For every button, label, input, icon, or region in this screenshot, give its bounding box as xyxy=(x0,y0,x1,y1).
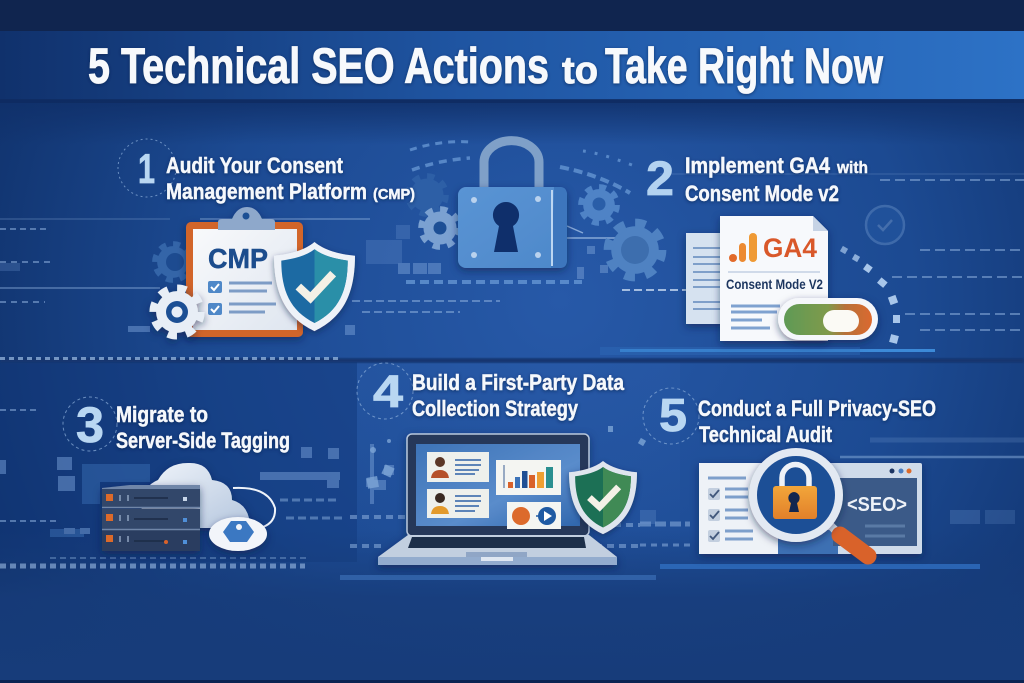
heading 2: with xyxy=(836,158,868,177)
keyhole xyxy=(493,202,519,252)
dashes around lock xyxy=(406,142,730,290)
icon: magnifying glass with lock xyxy=(753,452,868,556)
icon: browser window: <SEO> xyxy=(847,494,907,516)
profile card 1 xyxy=(427,452,489,482)
icon: cloud xyxy=(142,463,250,528)
icon: GA4 document xyxy=(720,216,828,341)
icon: dim clock xyxy=(866,206,904,244)
profile card 2 xyxy=(427,489,489,518)
heading 3 xyxy=(116,402,290,453)
icon: clipboard xyxy=(186,207,303,337)
icon: GA4 document: Consent Mode V2 xyxy=(726,276,823,292)
icon: laptop xyxy=(378,434,617,565)
panel: step 2 GA4 xyxy=(646,153,904,344)
heading 4: Collection Strategy xyxy=(412,396,579,421)
icon: scattered squares xyxy=(366,426,646,489)
icon: green shield xyxy=(569,461,637,534)
left dotted line xyxy=(0,357,340,360)
icon: curved dots xyxy=(840,246,900,344)
heading 3: Server-Side Tagging xyxy=(116,428,290,453)
heading 4: Build a First-Party Data xyxy=(412,370,625,395)
icon: dim gear xyxy=(155,244,191,280)
icon: back document xyxy=(686,233,726,324)
heading 4 xyxy=(412,370,625,421)
title: to xyxy=(562,50,598,92)
heading 1: (CMP) xyxy=(373,186,415,203)
number 4 badge: 4 xyxy=(373,366,403,417)
title: 5 Technical SEO Actions xyxy=(88,38,549,94)
number 5 badge xyxy=(643,388,699,444)
decorative data streaks xyxy=(0,142,1024,566)
heading 2: Implement GA4 xyxy=(685,153,831,178)
media card xyxy=(507,502,561,529)
heading 5 xyxy=(698,396,936,447)
heading 2 xyxy=(685,153,868,206)
panel: step 4 first-party data xyxy=(357,363,646,565)
title: Take Right Now xyxy=(605,38,883,94)
icon: browser window xyxy=(699,463,922,554)
panel: step 5 privacy-SEO audit xyxy=(643,388,936,556)
number 3 badge xyxy=(63,397,117,453)
icon: consent toggle xyxy=(778,298,878,340)
heading 2: Consent Mode v2 xyxy=(685,181,839,206)
gears around padlock xyxy=(409,177,661,276)
icon: tag node xyxy=(209,517,267,551)
number 1 badge xyxy=(118,139,176,197)
number 1 badge: 1 xyxy=(138,145,155,192)
number 4 badge xyxy=(357,363,413,419)
number 2 badge: 2 xyxy=(646,153,674,206)
panel: step 3 server-side tagging xyxy=(63,397,290,551)
heading 1: Audit Your Consent xyxy=(166,153,344,178)
icon: server stack xyxy=(102,485,200,551)
icon: clipboard: CMP xyxy=(208,243,268,274)
heading 1: Management Platform xyxy=(166,179,367,204)
icon: GA4 document: GA4 xyxy=(763,233,817,263)
bar chart card xyxy=(496,460,561,495)
number 5 badge: 5 xyxy=(659,389,687,441)
pixel squares xyxy=(0,225,1015,537)
panel: step 1 audit CMP xyxy=(118,139,415,337)
bottom dotted line xyxy=(0,564,305,568)
icon: shield with check xyxy=(274,242,355,331)
heading 5: Technical Audit xyxy=(699,422,833,447)
icon: central padlock xyxy=(409,141,661,276)
heading 1 xyxy=(166,153,415,204)
icon: connector loop xyxy=(233,488,275,527)
heading 5: Conduct a Full Privacy-SEO xyxy=(698,396,936,421)
title band xyxy=(0,31,1024,103)
heading 3: Migrate to xyxy=(116,402,208,427)
icon: white gear xyxy=(154,289,200,335)
number 3 badge: 3 xyxy=(76,397,104,453)
